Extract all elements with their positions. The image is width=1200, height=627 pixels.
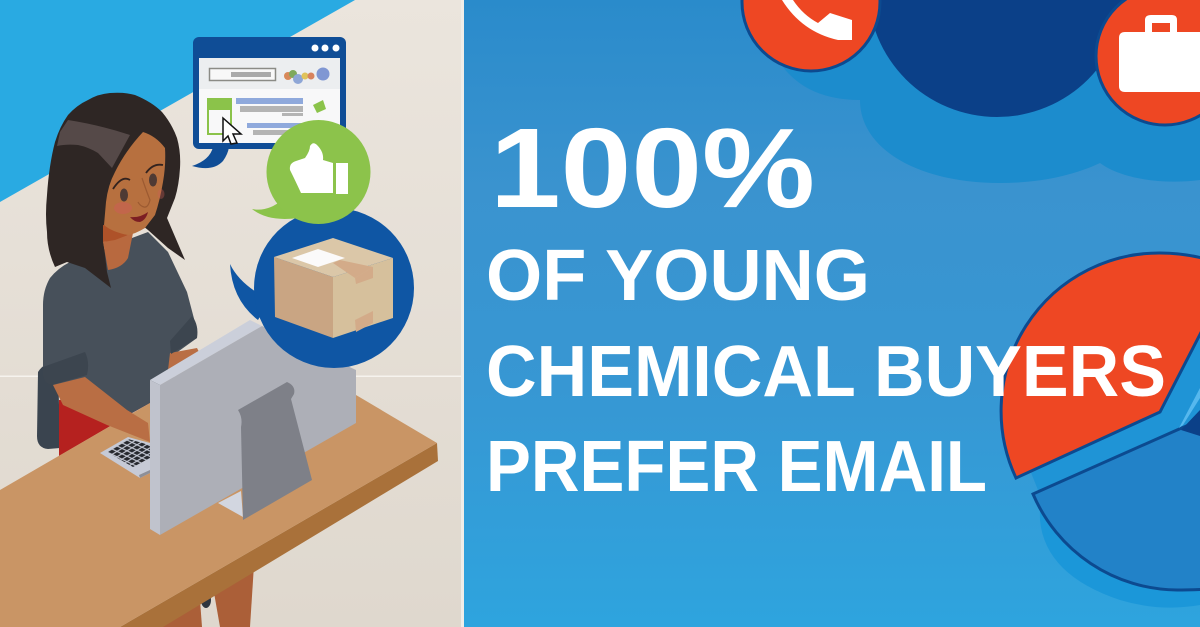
bubble tail [230,264,270,320]
phone handset [782,0,852,40]
desk edge [120,443,438,627]
window dots [312,44,340,52]
shirt [43,232,197,413]
box right face [333,258,393,338]
thumbnail band [208,99,231,110]
circle [1096,0,1200,125]
blue wall wedge [0,0,355,202]
result thumbnail [208,99,231,134]
eye left [120,188,128,202]
right sleeve [170,316,197,354]
stand [238,382,312,520]
keyboard [100,437,150,478]
cloud shadow [775,0,1200,183]
cheek left [114,202,132,214]
box left face [274,257,333,338]
search box [210,68,276,80]
briefcase handle [1145,15,1177,34]
box top face [274,238,393,277]
bubble circle [266,120,370,224]
keys [107,439,150,467]
far arm [168,348,199,370]
pie shadow [1040,400,1200,608]
bubble tail [252,200,298,219]
box label [292,249,345,267]
bubble circle [254,208,414,368]
face [104,132,165,235]
speech bubble: thumbs up [252,120,370,224]
green badge [313,100,326,113]
icon: phone circle [742,0,880,71]
box tape top [333,260,373,278]
hair [46,93,185,288]
panel: blue headline background [464,0,1200,627]
results header [199,58,340,89]
cheek right [158,189,164,199]
speech bubble: package [230,208,414,368]
panel edge [461,0,464,627]
arm [53,377,150,442]
icon: thumb [290,143,333,193]
desk top [0,350,437,627]
keyboard body [100,437,150,478]
skirt [59,395,150,456]
wall line [0,376,464,377]
red slice [1001,253,1200,478]
navy slice [1181,410,1200,436]
chair base [201,592,211,608]
browser window bubble [192,37,346,168]
briefcase body [1119,32,1200,92]
cloud [868,0,1126,117]
window content [199,58,340,143]
chair back [37,362,60,449]
stand base [218,491,243,517]
window frame [193,37,346,149]
circle [742,0,880,71]
left sleeve [43,352,88,385]
line 2: CHEMICAL BUYERS [486,332,1166,412]
search text [231,72,271,77]
monitor back [160,326,356,535]
brows [113,165,163,189]
bubble tail [192,147,229,168]
pie gap [1030,330,1200,495]
hair highlight [57,120,130,168]
legs [160,565,254,627]
box tape side [355,267,373,284]
line 3: PREFER EMAIL [486,427,987,507]
near leg [213,565,254,627]
blue slice [1033,416,1200,590]
eye right [149,174,157,186]
icon: briefcase circle [1096,0,1200,125]
box tape bottom [355,311,373,332]
cursor [223,118,241,144]
icon: cuff [336,163,348,194]
neck shadow [103,225,133,242]
neck [103,233,133,270]
pie chart [1001,253,1200,608]
headline [486,105,1166,507]
big number: 100% [490,105,815,231]
result lines [236,98,307,135]
panel: illustration of woman at desk [0,0,464,627]
wall background [0,0,464,627]
icon: cardboard box [274,238,393,338]
far leg [160,600,202,627]
line 1: OF YOUNG [486,236,870,316]
light sliver [1179,388,1200,428]
monitor side edge [150,380,160,535]
keyboard shadow edge [139,470,150,478]
nose [138,178,150,207]
search logo [284,68,330,84]
monitor [150,320,356,535]
mouth [130,212,148,222]
monitor top edge [150,320,262,385]
